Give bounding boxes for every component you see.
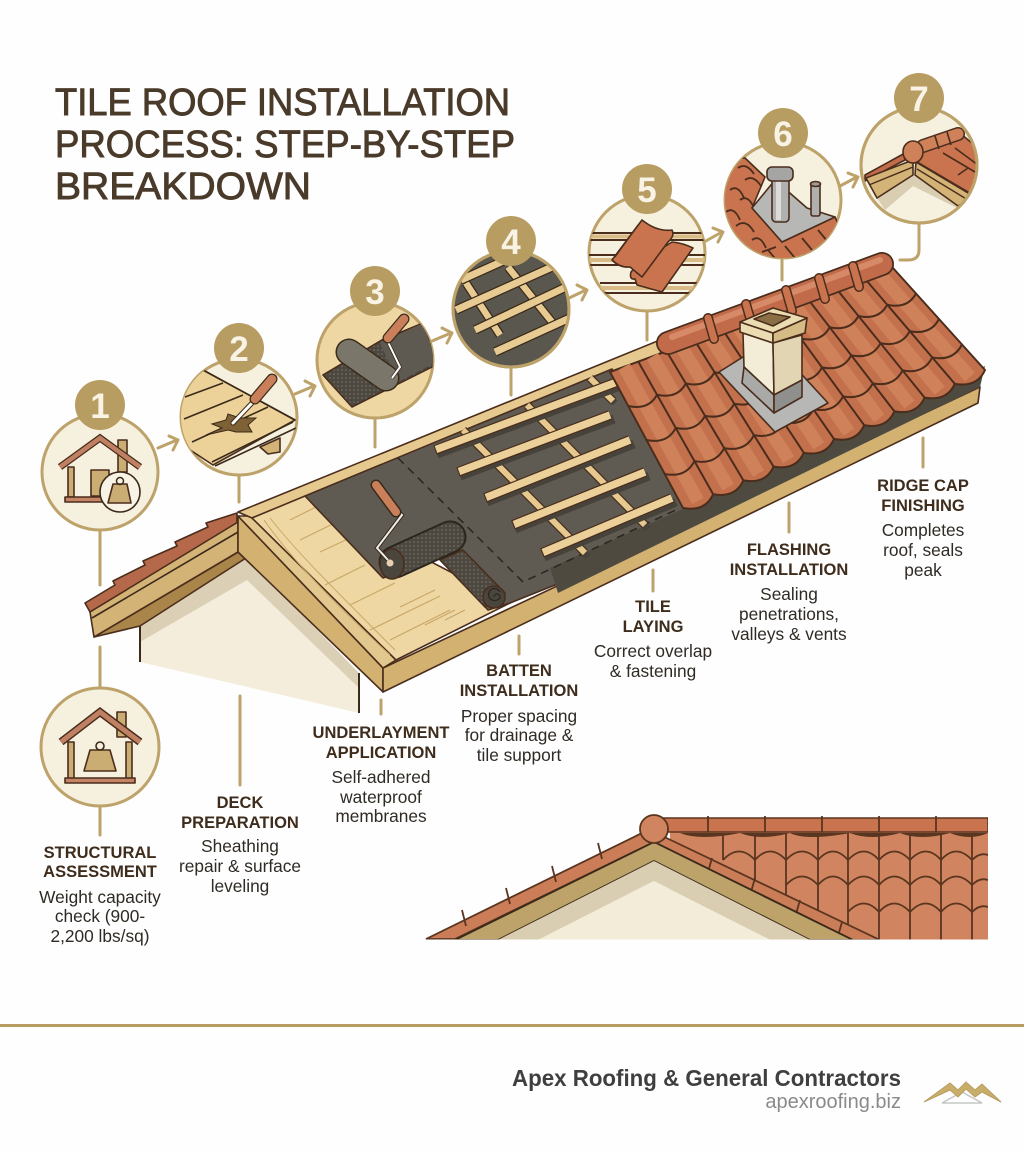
dark drip edge strip [550, 366, 985, 593]
title: BREAKDOWN [55, 166, 311, 208]
footer brand text [512, 1065, 901, 1113]
label: underlayment application: UNDERLAYMENT [313, 724, 449, 742]
label: structural assessment: STRUCTURAL [44, 844, 156, 862]
label: batten installation: INSTALLATION [460, 682, 578, 700]
step 2: deck preparation circle [175, 323, 297, 475]
chimney flashing [719, 340, 828, 432]
label: deck preparation: PREPARATION [181, 814, 299, 832]
label: flashing installation: Sealing [760, 584, 818, 604]
label: tile laying: Correct overlap [594, 641, 712, 661]
label: ridge cap finishing [877, 477, 969, 580]
step 4: batten installation circle [453, 216, 570, 367]
icon: footer logo mountains [924, 1082, 1001, 1103]
icon: wood deck repair [175, 370, 296, 466]
label: underlayment application [313, 724, 449, 826]
underlayment membrane [305, 369, 687, 610]
title: TILE ROOF INSTALLATION [55, 82, 510, 124]
label: flashing installation: INSTALLATION [730, 561, 848, 579]
label: underlayment application: Self-adhered [332, 767, 430, 787]
label: ridge cap finishing: peak [904, 560, 942, 580]
ridge cap [668, 260, 882, 343]
label: tile laying: LAYING [623, 618, 683, 636]
label: batten installation: BATTEN [486, 662, 552, 680]
footer brand text: Apex Roofing & General Contractors [512, 1065, 901, 1091]
label: batten installation: for drainage & [465, 725, 574, 745]
roller tool on membrane [376, 485, 505, 608]
label: ridge cap finishing: roof, seals [883, 540, 963, 560]
step 4: batten installation circle: 4 [501, 223, 521, 262]
step 6: flashing circle [724, 108, 842, 260]
gable wall [538, 881, 771, 940]
ridge end cap [640, 815, 668, 843]
label: ridge cap finishing: RIDGE CAP [877, 477, 969, 495]
left rake tiles [426, 833, 654, 939]
label: flashing installation: valleys & vents [731, 624, 847, 644]
footer brand text: apexroofing.biz [765, 1091, 901, 1113]
label: flashing installation: FLASHING [747, 541, 831, 559]
soffit shade [498, 861, 810, 940]
label: flashing installation: penetrations, [739, 604, 839, 624]
icon: house with weight [60, 438, 140, 512]
label: deck preparation [179, 794, 301, 896]
label: tile laying [594, 598, 712, 681]
eave fascia board [383, 387, 980, 692]
long battens [435, 382, 676, 557]
label: tile laying: & fastening [610, 661, 696, 681]
icon: tiles on battens [585, 220, 710, 293]
label: structural assessment [39, 844, 161, 946]
step 3: underlayment circle [317, 266, 440, 418]
step 3: underlayment circle: 3 [365, 273, 385, 312]
gable wall [140, 558, 359, 713]
cross battens [463, 378, 648, 557]
label: underlayment application: APPLICATION [326, 744, 436, 762]
label: ridge cap finishing: Completes [882, 520, 965, 540]
label: underlayment application: membranes [335, 806, 427, 826]
label: structural assessment: ASSESSMENT [43, 863, 157, 881]
step 6: flashing circle: 6 [773, 115, 793, 154]
left rake tiles [85, 513, 237, 612]
label: ridge cap finishing: FINISHING [881, 497, 965, 515]
step 1: structural assessment circle: 1 [90, 387, 110, 426]
icon: battens grid [456, 258, 570, 352]
step 5: tile laying circle [585, 164, 710, 311]
ridge strip [662, 816, 988, 832]
chimney [740, 308, 807, 413]
main roof illustration [85, 260, 985, 713]
right rake fascia [238, 516, 396, 692]
tile field [670, 832, 988, 940]
title [55, 82, 515, 208]
connector lines [100, 224, 923, 835]
step arrows [158, 173, 858, 450]
label: batten installation: tile support [477, 745, 561, 765]
tan rafter band [455, 842, 853, 940]
label: structural assessment: 2,200 lbs/sq) [51, 926, 149, 946]
label: deck preparation: DECK [217, 794, 263, 812]
tile seams [462, 843, 842, 936]
label: batten installation: Proper spacing [461, 706, 577, 726]
label: deck preparation: Sheathing [201, 836, 279, 856]
top wood strip [238, 340, 668, 518]
label: tile laying: TILE [635, 598, 671, 616]
seam dashed line [398, 458, 680, 582]
terracotta tile field [610, 268, 985, 509]
title: PROCESS: STEP-BY-STEP [55, 124, 515, 166]
label: deck preparation: leveling [211, 876, 269, 896]
icon: membrane roller [323, 319, 440, 407]
label: structural assessment: Weight capacity [39, 887, 161, 907]
left rake fascia [90, 522, 246, 637]
label: underlayment application: waterproof [339, 787, 422, 807]
icon: vents and flashing [725, 157, 838, 258]
step 7: ridge cap circle: 7 [909, 80, 929, 119]
step 1 structural weight icon circle [41, 688, 159, 806]
step 1: structural assessment circle [42, 380, 158, 530]
icon: ridge cap detail [865, 132, 980, 210]
right rake tiles [654, 832, 880, 940]
label: structural assessment: check (900- [55, 906, 145, 926]
label: flashing installation [730, 541, 848, 644]
footer rule [0, 1024, 1024, 1027]
bare wood deck [252, 496, 510, 660]
bottom ridge detail illustration [426, 816, 988, 940]
step 7: ridge cap circle [861, 73, 980, 223]
step 5: tile laying circle: 5 [637, 171, 657, 210]
label: batten installation [460, 662, 578, 765]
label: deck preparation: repair & surface [179, 856, 301, 876]
step 2: deck preparation circle: 2 [229, 330, 249, 369]
